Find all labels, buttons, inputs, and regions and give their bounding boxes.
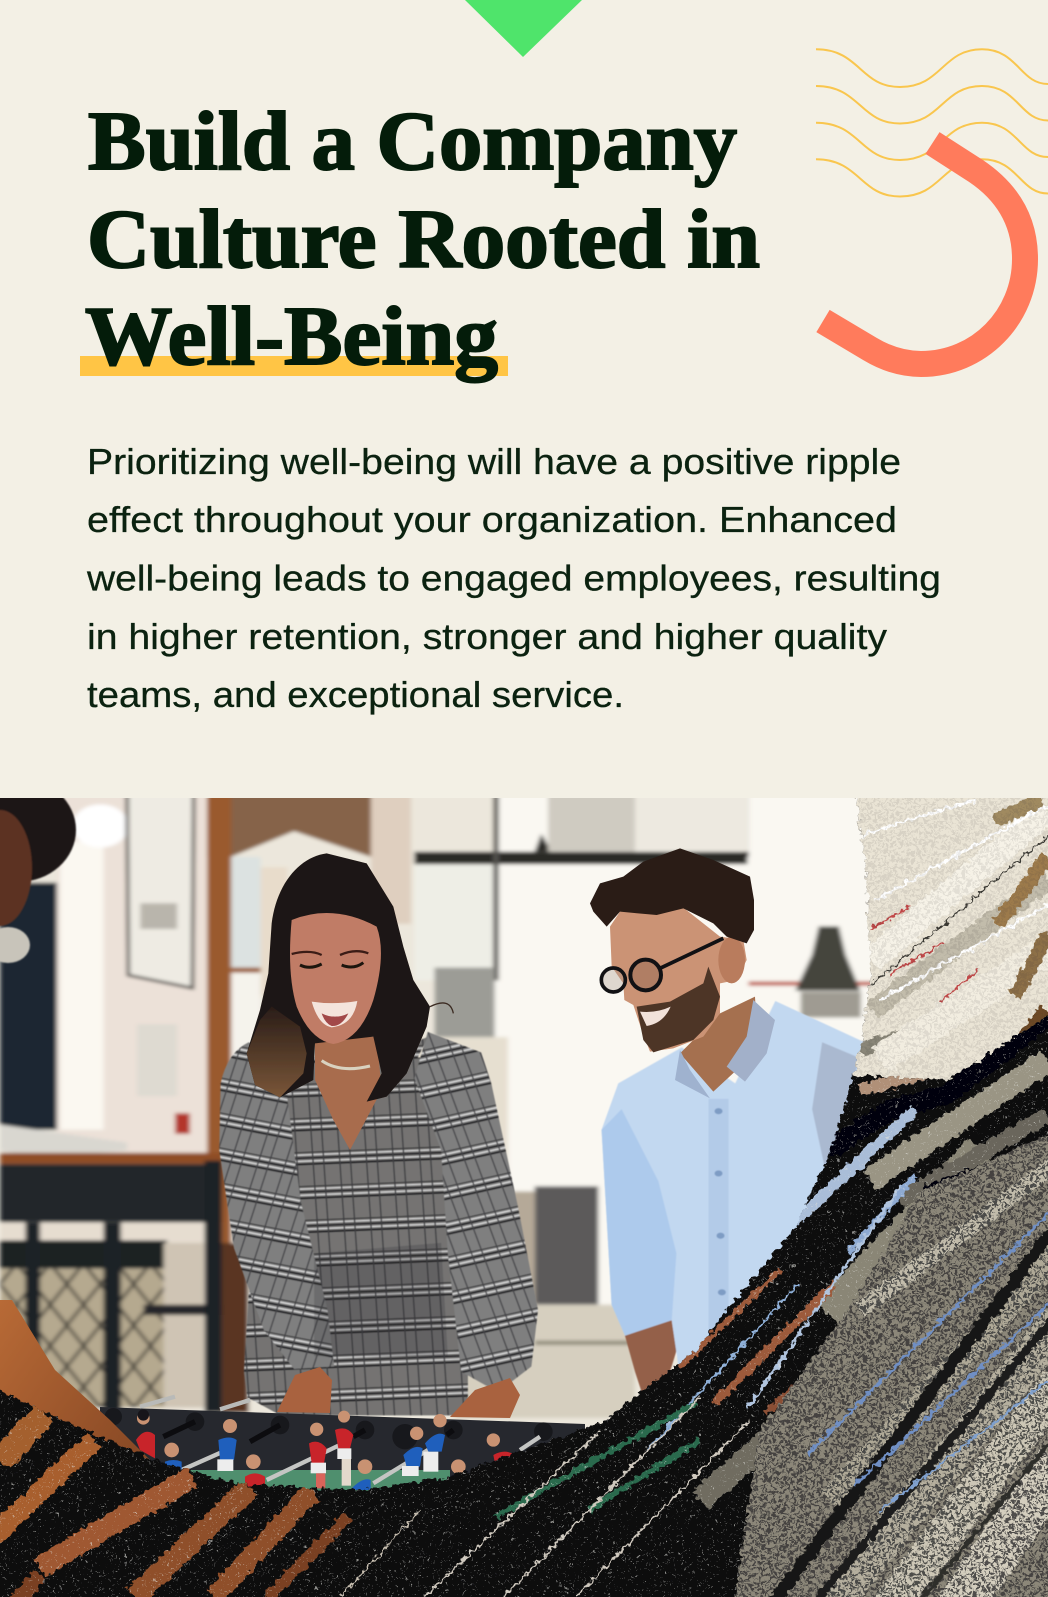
title: Well-Being	[85, 290, 498, 383]
man in light blue shirt	[590, 848, 876, 1402]
hands	[277, 1367, 520, 1418]
decorative waves and coral arc	[816, 48, 1048, 377]
table football table	[100, 1397, 585, 1492]
office background	[0, 798, 872, 1428]
dark middle and lower-left metal	[0, 1000, 1048, 1597]
body paragraph	[86, 441, 941, 715]
woman in plaid dress	[219, 853, 538, 1418]
head and glasses	[590, 848, 775, 1098]
coworker head at left edge	[0, 778, 76, 963]
title: Build a Company	[88, 95, 737, 188]
body paragraph: well-being leads to engaged employees, resulting	[86, 558, 941, 598]
gray speckled lower metal	[734, 1135, 1048, 1597]
title	[80, 95, 760, 384]
shirt and arm	[602, 1001, 876, 1402]
cream upper metal	[852, 798, 1048, 1082]
body paragraph: Prioritizing well-being will have a positive ripple	[87, 441, 901, 482]
foosball rods and players	[105, 1397, 553, 1490]
icon: green triangle	[465, 0, 582, 57]
body paragraph: effect throughout your organization. Enhanced	[87, 499, 897, 540]
glitched metal overlay	[0, 770, 1048, 1597]
body paragraph: in higher retention, stronger and higher quality	[87, 616, 888, 657]
photo: coworkers playing table football with glitched metal overlay	[0, 798, 1048, 1597]
head, hair and necklace	[247, 853, 453, 1150]
body paragraph: teams, and exceptional service.	[87, 674, 624, 715]
title: Culture Rooted in	[87, 193, 760, 286]
plaid dress	[219, 1032, 538, 1415]
foreground arm	[0, 1300, 150, 1460]
